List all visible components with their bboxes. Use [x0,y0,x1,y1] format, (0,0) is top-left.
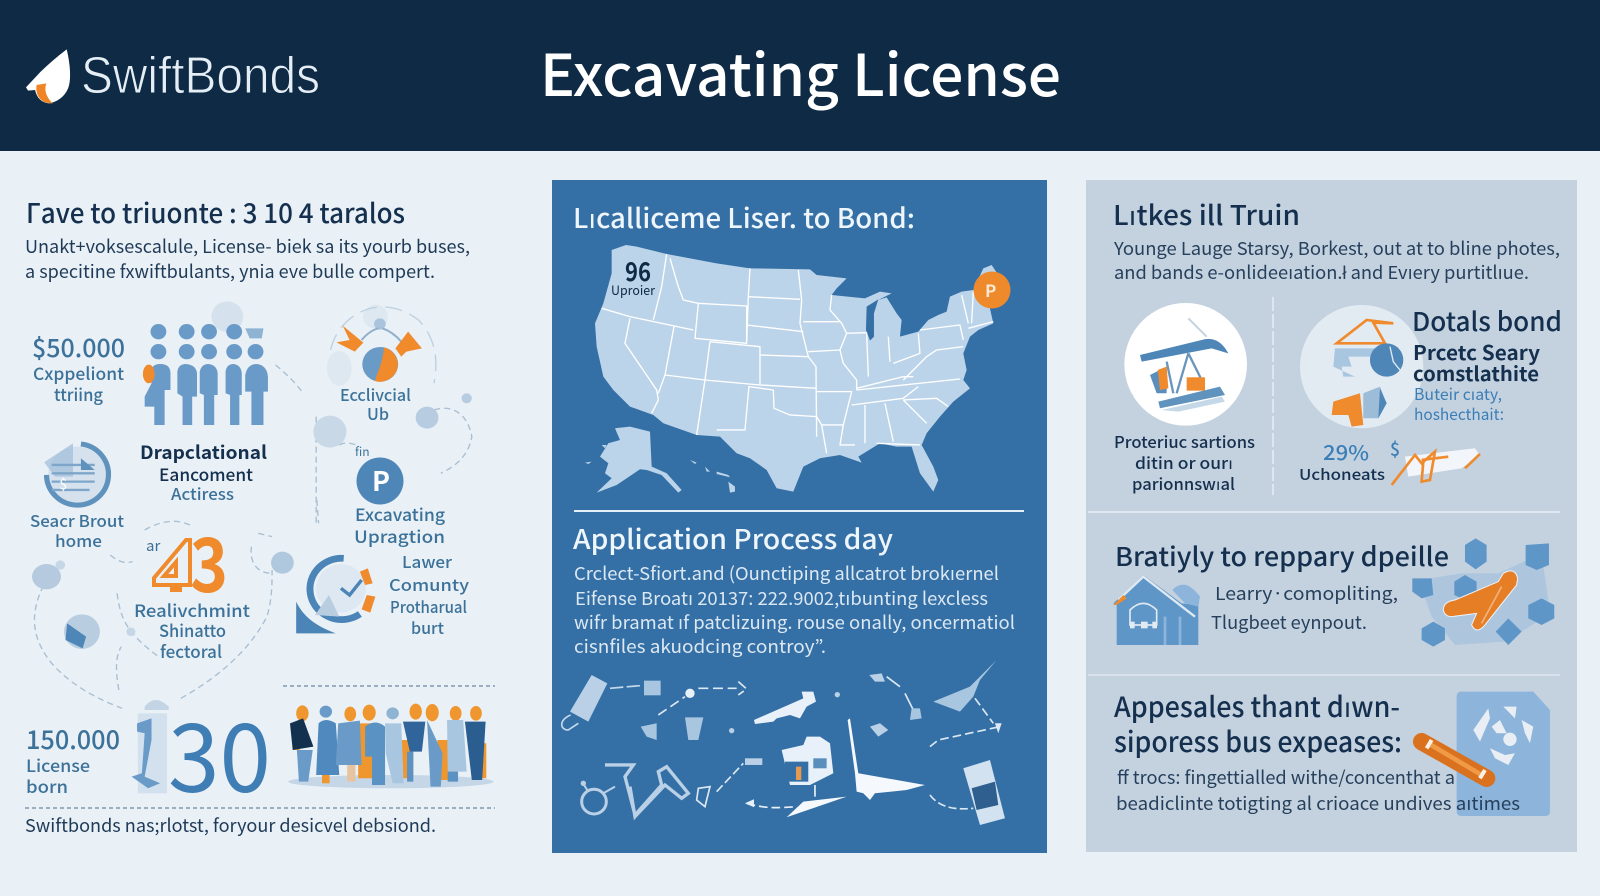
US map [585,245,1008,493]
label: Drapclational: Drapclational [140,439,267,465]
icons: small blobs [32,552,294,649]
section heading: Appesales: Appesales thant dıwn- [1114,686,1400,726]
label: Buteir [1414,381,1504,425]
label: Realivchmint: fectoral [160,638,222,663]
left intro text: a specitine fxwiftbulants, ynia eve bulle compert. [25,258,435,284]
divider [574,510,1024,512]
stat: 43: 3 [190,505,228,614]
label: Seacr Brout [30,508,125,552]
left intro text [25,233,470,284]
logo wordmark: SwiftBonds [81,47,320,105]
label: Proteriuc: parionnswıal [1132,471,1235,495]
map pin [974,272,1010,308]
icon: pump jack in white circle [1124,303,1247,426]
dotted rules [25,686,495,808]
label: Realivchmint [134,597,250,663]
label: Prcetc Seary [1413,337,1541,387]
stat: 29%: 29% [1323,437,1369,466]
document icon [1457,692,1550,816]
label: Ecclivcial: Ecclivcial [340,382,411,406]
icon: house [1113,575,1200,645]
process icons [562,660,1005,825]
map callout: 96: Uproier [611,280,656,299]
label: Lawer: burt [411,615,445,639]
label: Excavating: Upragtion [354,523,445,548]
panel: right [1086,180,1577,852]
dashed connector network [34,500,319,708]
label: Seacr Brout: Seacr Brout [30,508,125,532]
icon: gauge with check [296,558,375,633]
stat: 150,000: 150.000 [26,720,120,757]
section heading: Bratiyly: Bratiyly to reppary dpeille [1115,537,1449,574]
application text: Crclect-Sfiort.and (Ounctiping allcatrot brokıernel [574,560,999,586]
icon: circle with roof, orange and blue pieces [1300,305,1423,428]
icon: P coin: P [372,460,390,499]
text: fingettialled: ff trocs: fingettialled withe/concenthat a [1117,764,1455,790]
panel: center [552,180,1047,853]
label: Lawer: Lawer [402,549,452,573]
center heading: Lıcalliceme Liser. to Bond: [573,197,915,236]
right intro text: and bands e-onlideeıation.ł and Evıery purtitlıue. [1114,259,1529,285]
label: Proteriuc: ditin or ourı [1135,450,1233,474]
label: Excavating: Excavating [355,501,445,526]
stat: 150,000 [26,720,120,798]
label: Seacr Brout: home [55,528,102,552]
panel: left column heading: Γave to triuonte : 3 10 4 taralos [26,192,405,231]
vertical dashed divider [1272,297,1274,495]
icon: document ring: $ [59,474,67,494]
icon: down arrow column [132,700,169,793]
label: Lawer [389,549,469,639]
section heading: Application Process day [573,518,893,557]
right intro text: Younge Lauge Starsy, Borkest, out at to bline photes, [1113,235,1560,261]
icon: wrench and hexagon map [1412,538,1554,647]
label: Lawer: Comunty [389,572,469,596]
icon: orange arrow [1392,448,1480,485]
stat: 43: ar [146,535,160,556]
label: Prcetc Seary: comstlathite [1413,358,1539,387]
map callout: 96 [611,252,656,299]
label: Drapclational [140,439,267,505]
label: Proteriuc [1114,429,1255,495]
illustration: crowd [288,704,494,788]
stat: 30: 30 [168,683,271,820]
stat: 29%: Uchoneats [1299,464,1385,485]
label: Ecclivcial [340,382,411,425]
label: Buteir: hoshecthait: [1414,401,1504,425]
label: Ecclivcial: Ub [367,401,389,425]
connector dashes upper [276,365,472,523]
section heading: Appesales [1114,686,1402,761]
title: Excavating License [540,29,1061,113]
label: Buteir: Buteir cıaty, [1414,381,1502,405]
text: Learry [1211,580,1398,635]
label: Dotals bond: Dotals bond [1412,302,1562,339]
right heading: Lıtkes ill Truin [1113,194,1300,233]
footer note: Swiftbonds nas;rlotst, foryour desicvel debsiond. [25,812,436,838]
icon: P coin [355,443,404,504]
label: Proteriuc: Proteriuc sartions [1114,429,1255,453]
text: Learry: Learry·comopliting, [1215,580,1398,606]
stat: 150,000: License [26,752,90,777]
stat: 150,000: born [26,773,68,798]
decorative nodes [313,393,472,448]
stat: $50,000: Cxppeliont [33,360,124,385]
map callout: 96: 96 [625,252,651,289]
icon: pie with arrows [327,305,436,386]
application text: wifr bramat ıf patclizuing. rouse onally, oncermatiol [574,609,1015,635]
label: Lawer: Protharual [390,594,467,618]
section heading: Appesales: siporess bus expeases: [1114,721,1402,761]
stat: $50,000: $50.000 [32,329,125,365]
stat: 43 [146,505,228,614]
icon: orange pipe [1422,740,1487,778]
map pin: P [985,277,996,302]
stat: $50,000 [32,329,125,406]
logo icon [26,49,70,103]
right intro text [1113,235,1560,285]
label: Realivchmint: Shinatto [159,617,226,642]
stat: 29%: $ [1390,436,1400,462]
label: Prcetc Seary: Prcetc Seary [1413,337,1541,366]
application text: cisnfiles akuodcing controy”. [574,633,826,659]
icon: P coin: fin [355,443,370,460]
header band [0,0,1600,151]
alaska [597,427,682,493]
icon: people row [143,301,268,425]
label: Drapclational: Actiress [171,481,234,505]
label: Realivchmint: Realivchmint [134,597,250,622]
application text: Eifense Broatı 20137: 222.9002,tıbunting lexcless [575,585,988,611]
hawaii [585,445,735,493]
left intro text: Unakt+voksescalule, License- biek sa its yourb buses, [25,233,470,259]
icon: document ring [44,443,108,505]
divider [1088,674,1560,676]
application text [574,560,1015,659]
label: Drapclational: Eancoment [159,461,253,486]
text: Learry: Tlugbeet eynpout. [1211,609,1367,635]
stat: $50,000: ttriing [54,381,103,406]
label: Excavating [354,501,445,548]
text: fingettialled [1116,764,1520,816]
stat: 29% [1299,436,1400,485]
text: fingettialled: beadiclinte totigting al crioace undives aıtimes [1116,790,1520,816]
divider [1088,511,1560,513]
